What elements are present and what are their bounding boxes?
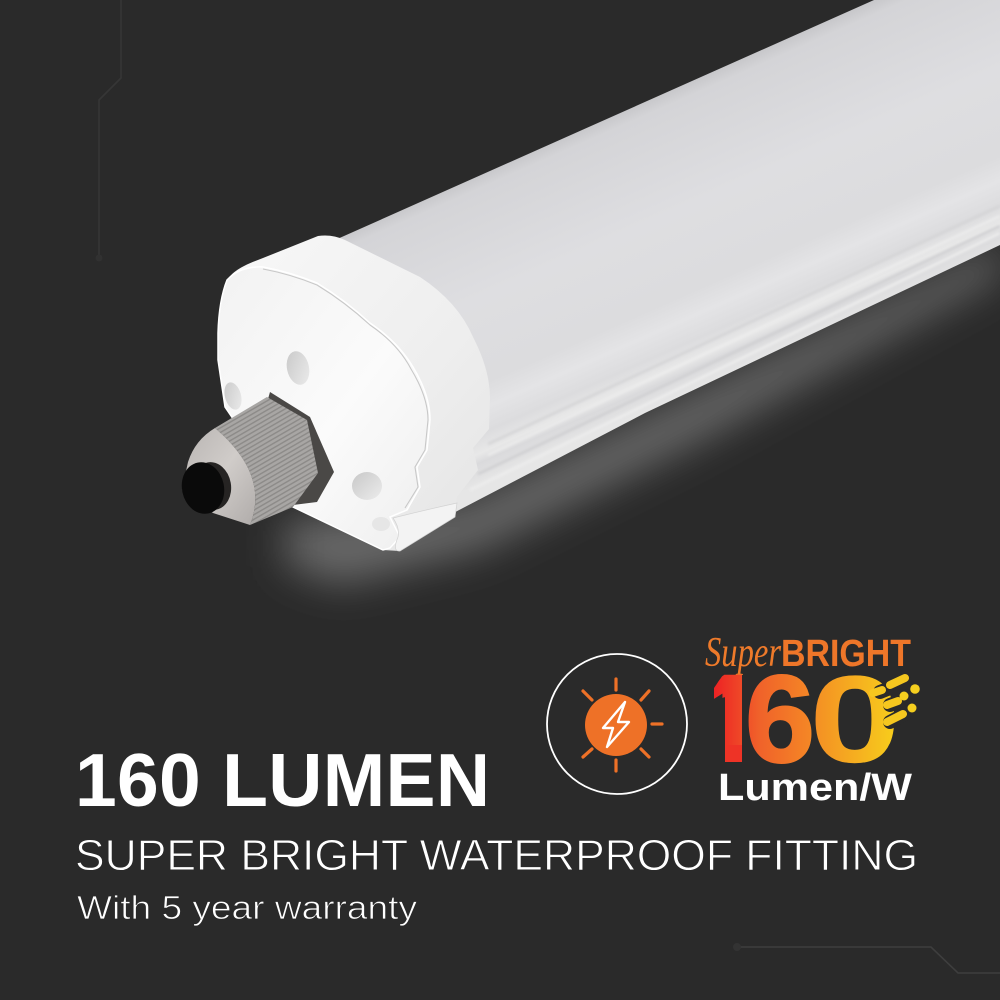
subheading: SUPER BRIGHT WATERPROOF FITTING bbox=[75, 831, 918, 880]
warranty note: With 5 year warranty bbox=[77, 889, 418, 926]
mounting hole upper bbox=[284, 349, 312, 387]
logo script word: Super bbox=[705, 630, 781, 676]
logo bold word: BRIGHT bbox=[781, 633, 911, 675]
speed dashes bbox=[873, 678, 920, 722]
mounting hole lower bbox=[352, 472, 382, 500]
knurled collar bbox=[215, 397, 318, 525]
logo number 160: 0 bbox=[809, 651, 901, 789]
latch clip bbox=[393, 503, 457, 551]
end cap band bbox=[218, 236, 490, 551]
plug sleeve bbox=[189, 459, 235, 513]
lamp diffuser body bbox=[335, 0, 1000, 520]
end cap face bbox=[218, 267, 430, 550]
logo number 160 bbox=[714, 674, 894, 764]
logo number 160: 6 bbox=[745, 651, 815, 789]
logo number 160: 1 bbox=[695, 651, 764, 789]
icon ring bbox=[547, 654, 687, 794]
gland dome bbox=[182, 428, 255, 525]
cap groove line bbox=[263, 269, 428, 508]
sun rays bbox=[583, 679, 662, 771]
glow under lamp bbox=[285, 245, 1000, 585]
lamp lower ridges bbox=[470, 206, 1000, 490]
small latch recess bbox=[372, 517, 390, 531]
logo: Super Bright 160 Lumen/W bbox=[705, 638, 920, 801]
mounting hole left bbox=[222, 380, 244, 412]
cable gland bbox=[177, 392, 334, 525]
icon: sun with lightning bolt bbox=[547, 654, 687, 794]
LED lamp product bbox=[177, 0, 1000, 551]
logo unit label: Lumen/W bbox=[718, 767, 912, 809]
sun disc bbox=[585, 694, 647, 756]
black plug bbox=[177, 458, 235, 518]
heading: 160 LUMEN bbox=[75, 738, 490, 822]
lightning bolt bbox=[603, 702, 629, 747]
dark hex nut bbox=[262, 392, 334, 505]
plug face bbox=[177, 458, 229, 518]
